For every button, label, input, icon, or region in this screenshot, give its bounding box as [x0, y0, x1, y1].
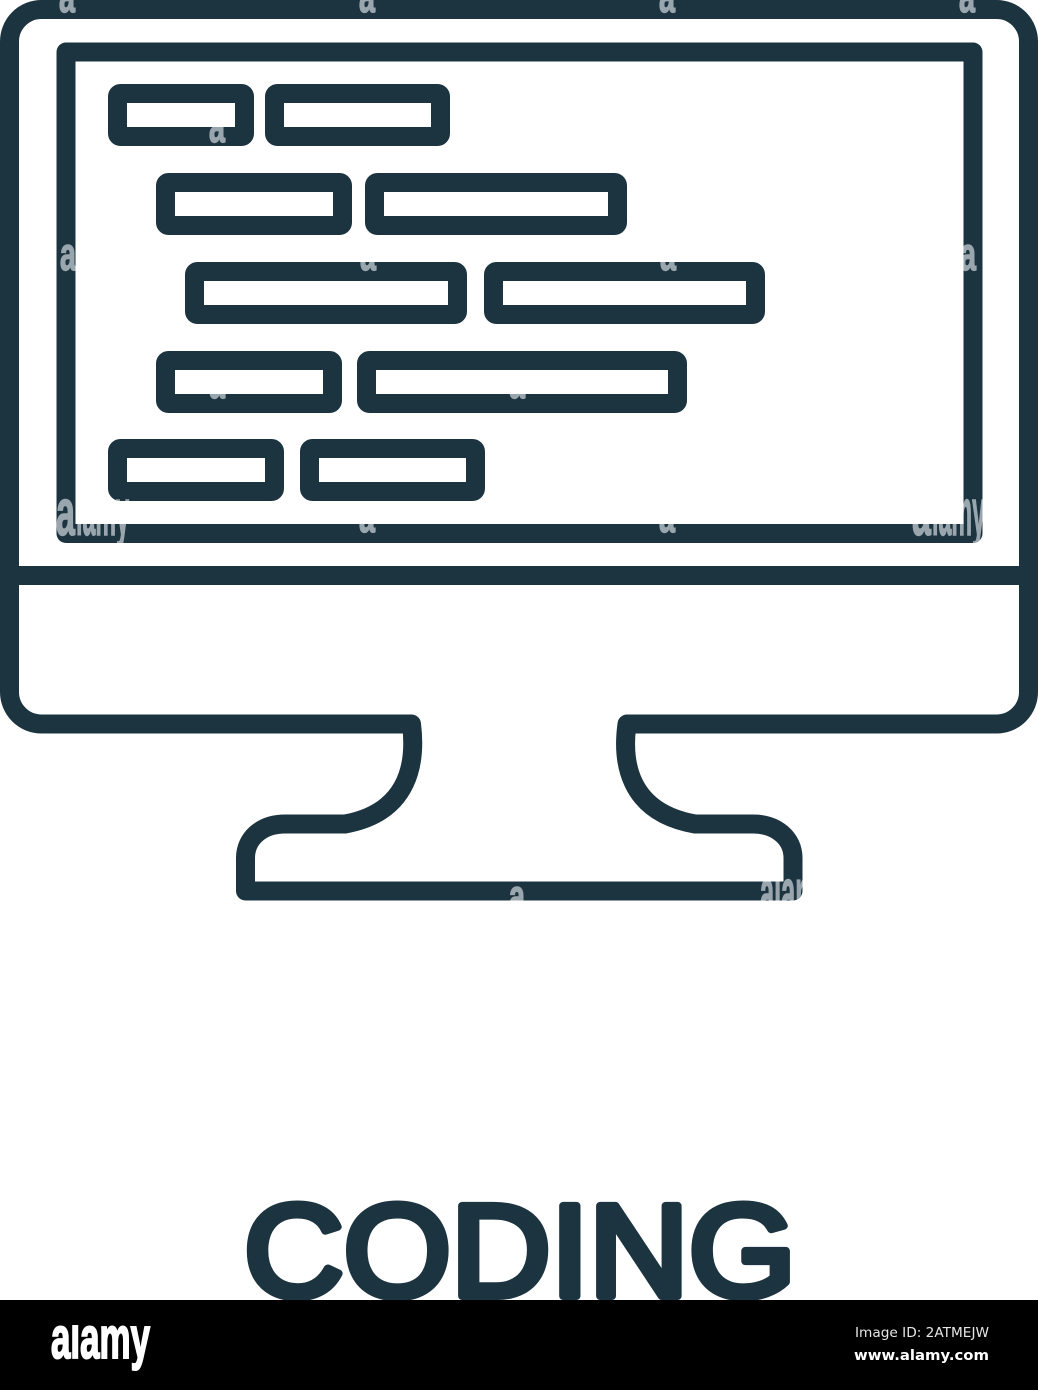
- watermark fragments on the icon strokes: lamy: [76, 475, 129, 549]
- code line 2: [166, 182, 618, 226]
- code line 4: [166, 360, 678, 404]
- watermark fragments on the icon strokes: alamy: [760, 855, 832, 929]
- watermark fragments on the icon strokes: a: [359, 490, 375, 542]
- footer image id: Image ID: 2ATMEJW: [855, 1325, 989, 1341]
- watermark fragments on the icon strokes: a: [960, 228, 976, 280]
- watermark fragments on the icon strokes: a: [360, 228, 376, 280]
- watermark fragments on the icon strokes: a: [912, 475, 932, 549]
- watermark fragments on the icon strokes: a: [209, 356, 225, 408]
- code line 3: [194, 272, 756, 314]
- footer website: www.alamy.com: [854, 1348, 989, 1364]
- footer bar: [0, 1300, 1038, 1390]
- monitor chin divider: [10, 566, 1028, 585]
- watermark fragments on the icon strokes: a: [509, 870, 525, 922]
- footer logo: alamy: alamy: [51, 1306, 150, 1371]
- watermark fragments on the icon strokes: a: [659, 490, 675, 542]
- code line 1: [118, 94, 440, 136]
- screen frame: [66, 52, 973, 534]
- watermark fragments on the icon strokes: a: [60, 228, 76, 280]
- watermark fragments on the icon strokes: a: [660, 228, 676, 280]
- watermark fragments on the icon strokes: a: [56, 475, 76, 549]
- watermark fragments on the icon strokes: a: [209, 100, 225, 152]
- watermark fragments on the icon strokes: [56, 0, 985, 929]
- title: CODING: CODING: [244, 1177, 796, 1324]
- watermark fragments on the icon strokes: a: [509, 356, 525, 408]
- code line 5: [118, 448, 476, 492]
- icon: computer monitor with code: [10, 10, 1028, 891]
- monitor body and stand outline: [10, 10, 1028, 891]
